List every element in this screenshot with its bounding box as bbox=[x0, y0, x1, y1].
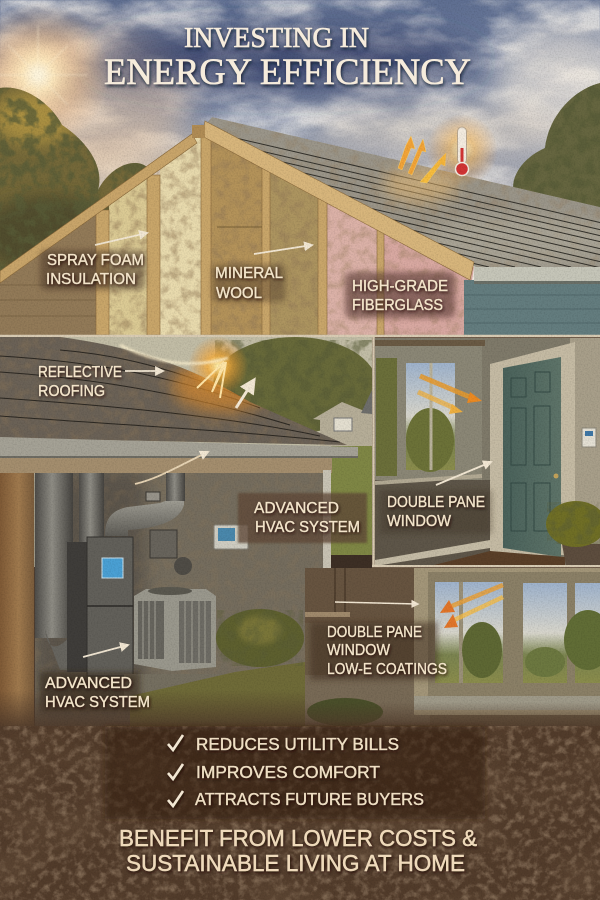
outdoor AC unit bbox=[124, 587, 216, 696]
electrical boxes bbox=[146, 492, 177, 558]
arrow: spray foam bbox=[95, 233, 147, 245]
furnace screen bbox=[102, 558, 123, 578]
panel: door and window interior bbox=[375, 338, 600, 566]
fascia bbox=[0, 458, 332, 570]
shrub bbox=[307, 698, 383, 726]
icon: sun bbox=[0, 10, 104, 128]
benefit 1: REDUCES UTILITY BILLS bbox=[196, 734, 399, 754]
icon: thermometer bbox=[428, 116, 496, 182]
title: INVESTING IN bbox=[184, 23, 369, 54]
window frame bbox=[375, 340, 485, 483]
icon: heat arrows bbox=[398, 136, 446, 183]
label: double pane window: DOUBLE PANE bbox=[387, 494, 485, 511]
label: spray foam insulation: INSULATION bbox=[46, 271, 136, 288]
roof: shingles with reflection bbox=[0, 337, 350, 447]
thermostat bbox=[214, 525, 248, 549]
high-grade fiberglass bbox=[327, 190, 474, 335]
label: double pane window: WINDOW bbox=[387, 513, 451, 530]
label: advanced HVAC right: HVAC SYSTEM bbox=[255, 519, 360, 536]
divider lines between panels bbox=[0, 336, 600, 567]
icon: check 2 bbox=[168, 764, 183, 779]
gable: insulation bays bbox=[0, 120, 474, 335]
wall thermostat bbox=[582, 428, 596, 447]
arrow: furnace bbox=[83, 645, 128, 657]
benefit 2: IMPROVES COMFORT bbox=[196, 762, 380, 782]
title backing shadow bbox=[90, 28, 480, 92]
backyard scenery bbox=[34, 337, 372, 568]
label backing: mineral wool bbox=[212, 264, 286, 302]
label: double pane window bbox=[387, 494, 485, 530]
label backing: low-e bbox=[310, 622, 438, 680]
closing message: BENEFIT FROM LOWER COSTS & bbox=[119, 825, 477, 851]
label: advanced HVAC left: HVAC SYSTEM bbox=[45, 694, 150, 711]
potted plant bbox=[546, 501, 600, 566]
title: ENERGY EFFICIENCY bbox=[104, 52, 471, 93]
ducts bbox=[35, 473, 185, 670]
label: reflective roofing: ROOFING bbox=[38, 383, 105, 400]
spray foam insulation bbox=[109, 120, 201, 335]
icon: low-e heat arrows bbox=[440, 585, 503, 628]
label: high-grade fiberglass: FIBERGLASS bbox=[352, 297, 443, 314]
label backing: spray foam bbox=[40, 250, 145, 290]
label: advanced HVAC left bbox=[45, 675, 150, 711]
tree: right bbox=[513, 83, 600, 207]
label: spray foam insulation: SPRAY FOAM bbox=[47, 252, 144, 269]
label: advanced HVAC right: ADVANCED bbox=[254, 500, 339, 517]
sunlight reflection bbox=[120, 336, 248, 398]
wood studs bbox=[96, 135, 384, 335]
roof: shingles bbox=[205, 117, 600, 268]
panel: sky and attic cutaway bbox=[0, 0, 600, 336]
gutter bbox=[0, 437, 358, 458]
bottom fade bbox=[305, 702, 600, 732]
label: mineral wool: WOOL bbox=[216, 285, 262, 302]
closing message bbox=[119, 825, 477, 876]
grass bbox=[130, 662, 305, 730]
label: spray foam insulation bbox=[46, 252, 144, 288]
mineral wool bbox=[211, 141, 318, 335]
benefits backing band bbox=[105, 727, 485, 819]
benefit 3: ATTRACTS FUTURE BUYERS bbox=[195, 789, 424, 809]
bush bbox=[216, 609, 304, 667]
siding and gutter bbox=[464, 266, 600, 336]
tree: left bbox=[0, 88, 146, 270]
label: mineral wool bbox=[215, 265, 283, 302]
label: double pane window low-e coatings: DOUBLE PANE bbox=[327, 624, 422, 641]
label: reflective roofing bbox=[38, 364, 122, 400]
arrow: low-e window bbox=[335, 602, 418, 604]
bottom fade bbox=[0, 690, 305, 732]
soil texture overlay bbox=[0, 726, 600, 900]
sky with clouds bbox=[0, 0, 600, 280]
rafters bbox=[0, 121, 474, 283]
label: double pane window low-e coatings: LOW-E COATINGS bbox=[327, 661, 447, 678]
label: mineral wool: MINERAL bbox=[215, 265, 283, 282]
arrow: to gutter bbox=[135, 452, 208, 484]
wall gas meter bbox=[174, 557, 192, 575]
wood post bbox=[0, 458, 34, 730]
arrow: reflective roofing bbox=[125, 370, 163, 372]
label: high-grade fiberglass bbox=[352, 278, 448, 314]
label: advanced HVAC right bbox=[254, 500, 360, 536]
label backing: fiberglass bbox=[345, 272, 455, 318]
icon: check 1 bbox=[168, 735, 183, 750]
label backing: double pane bbox=[380, 490, 492, 534]
label: double pane window low-e coatings: WINDOW bbox=[327, 642, 390, 659]
baseboard and floor bbox=[375, 540, 565, 566]
window frame and panes bbox=[414, 568, 600, 715]
icon: check 3 bbox=[168, 791, 183, 806]
label backing: HVAC left bbox=[40, 672, 140, 712]
panel: reflective roofing and HVAC bbox=[0, 336, 377, 732]
benefits checklist bbox=[168, 734, 424, 809]
furnace bbox=[67, 537, 133, 676]
label: reflective roofing: REFLECTIVE bbox=[38, 364, 122, 381]
label backing: HVAC right bbox=[238, 493, 367, 543]
neighbouring house bbox=[313, 390, 372, 446]
title bbox=[104, 23, 471, 93]
label: double pane window low-e coatings bbox=[327, 624, 447, 678]
closing message: SUSTAINABLE LIVING AT HOME bbox=[126, 850, 465, 876]
arrow: mineral wool bbox=[254, 245, 312, 254]
icon: heat arrows through window bbox=[418, 376, 482, 414]
arrow: double pane window bbox=[436, 462, 491, 485]
door trim bbox=[490, 342, 575, 555]
arrow: reflected heat bbox=[236, 380, 254, 408]
exterior wall bbox=[35, 470, 331, 730]
panel: low-e window bbox=[305, 568, 600, 732]
label: high-grade fiberglass: HIGH-GRADE bbox=[352, 278, 448, 295]
door bbox=[503, 357, 561, 557]
label: advanced HVAC left: ADVANCED bbox=[45, 675, 132, 692]
